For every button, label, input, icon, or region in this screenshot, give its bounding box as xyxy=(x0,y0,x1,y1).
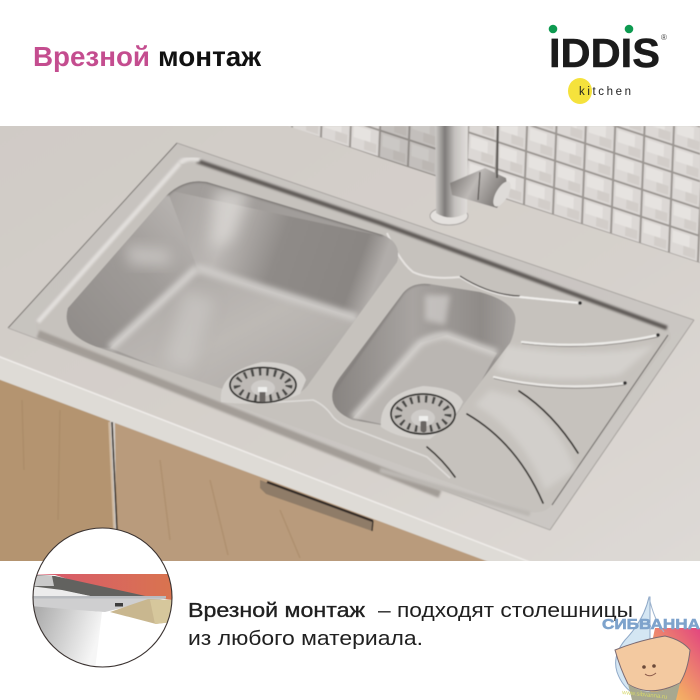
title xyxy=(33,41,262,72)
cabinet gap xyxy=(112,422,117,530)
cabinet handle xyxy=(260,480,373,531)
mosaic tile backsplash xyxy=(291,126,700,264)
caption text xyxy=(188,599,633,650)
rim right dark line xyxy=(552,335,668,505)
caption text: – подходят столешницы xyxy=(378,599,633,622)
drainboard grooves xyxy=(427,297,660,503)
rim upper dark band xyxy=(197,161,667,328)
small drain strainer xyxy=(381,386,463,439)
countertop xyxy=(0,116,700,571)
main drain strainer xyxy=(221,362,306,404)
bowl highlights xyxy=(210,190,250,250)
watermark: СИБВАННА mascot xyxy=(602,597,700,700)
clip slot xyxy=(115,603,123,606)
worktop cut edge xyxy=(30,574,172,600)
chipboard xyxy=(110,599,172,624)
title: Врезной xyxy=(33,41,150,72)
logo: IDDIS kitchen: IDDIS xyxy=(549,30,660,76)
watermark: СИБВАННА mascot: СИБВАННА xyxy=(602,616,700,633)
cabinet fronts xyxy=(0,379,488,561)
caption text: Врезной монтаж xyxy=(188,599,365,622)
main bowl xyxy=(60,175,405,400)
steel plate xyxy=(30,596,166,598)
sink rim section xyxy=(34,575,146,596)
faucet xyxy=(429,126,508,226)
photo: sink in kitchen countertop xyxy=(0,116,700,575)
rim recess xyxy=(36,158,671,512)
title: монтаж xyxy=(158,41,262,72)
sink plate xyxy=(8,143,694,530)
steel bowl wall xyxy=(34,606,102,666)
caption text: из любого материала. xyxy=(188,627,423,650)
rim lower shadow band xyxy=(38,334,440,494)
inset detail circle xyxy=(30,528,172,670)
pressed contour xyxy=(386,232,520,298)
countertop front edge xyxy=(0,358,376,519)
logo: IDDIS kitchen: ® xyxy=(661,33,667,42)
pressed drainboard light zones xyxy=(495,345,655,379)
rim left highlight xyxy=(38,163,180,322)
small bowl xyxy=(332,283,516,425)
logo: IDDIS kitchen: kitchen xyxy=(579,86,631,98)
logo: IDDIS kitchen xyxy=(549,25,667,104)
